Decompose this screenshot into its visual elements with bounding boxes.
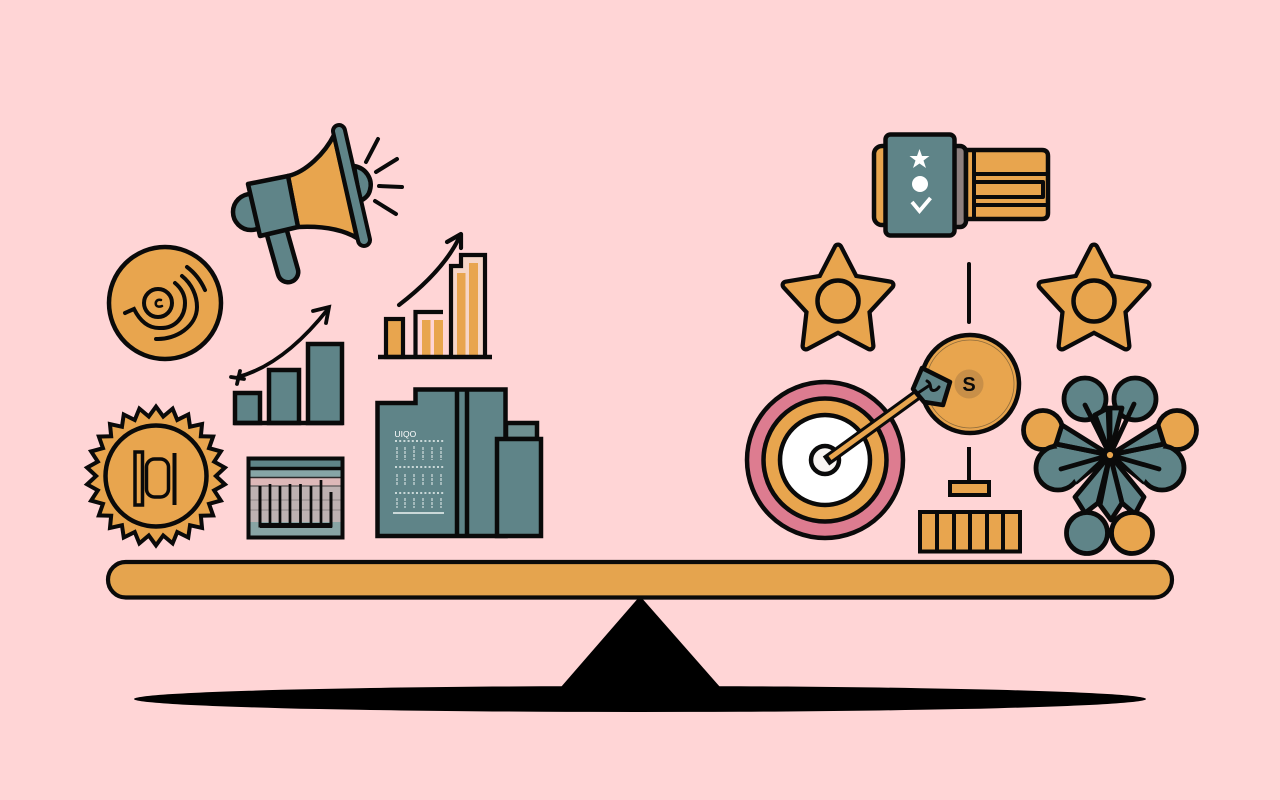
icon: left star	[786, 248, 890, 346]
bar chart: rising orange bars	[378, 234, 492, 357]
seesaw beam	[108, 562, 1172, 598]
icon: megaphone	[233, 131, 402, 272]
icon: segmented block	[920, 512, 1020, 552]
icon: sun badge	[89, 408, 223, 544]
icon: right star	[1042, 248, 1146, 346]
icon: calendar chart	[248, 458, 342, 538]
icon: spiral disc	[109, 247, 221, 359]
bar chart: rising teal bars	[231, 307, 343, 423]
icon: loyalty card holder	[874, 134, 1048, 236]
arrow: tag pointing at target centre	[826, 368, 950, 461]
icon: dollar coin	[921, 335, 1019, 433]
seesaw fulcrum	[561, 596, 720, 687]
icon: radial flower network	[1024, 378, 1196, 554]
connector with small bar	[950, 447, 989, 495]
connector line above coin	[967, 264, 971, 322]
icon: target	[747, 382, 903, 538]
icon: dollar coin: S	[962, 374, 976, 396]
seesaw shadow	[134, 686, 1146, 712]
icon: document building	[378, 389, 541, 536]
tiny document text: UIQO	[394, 429, 417, 439]
